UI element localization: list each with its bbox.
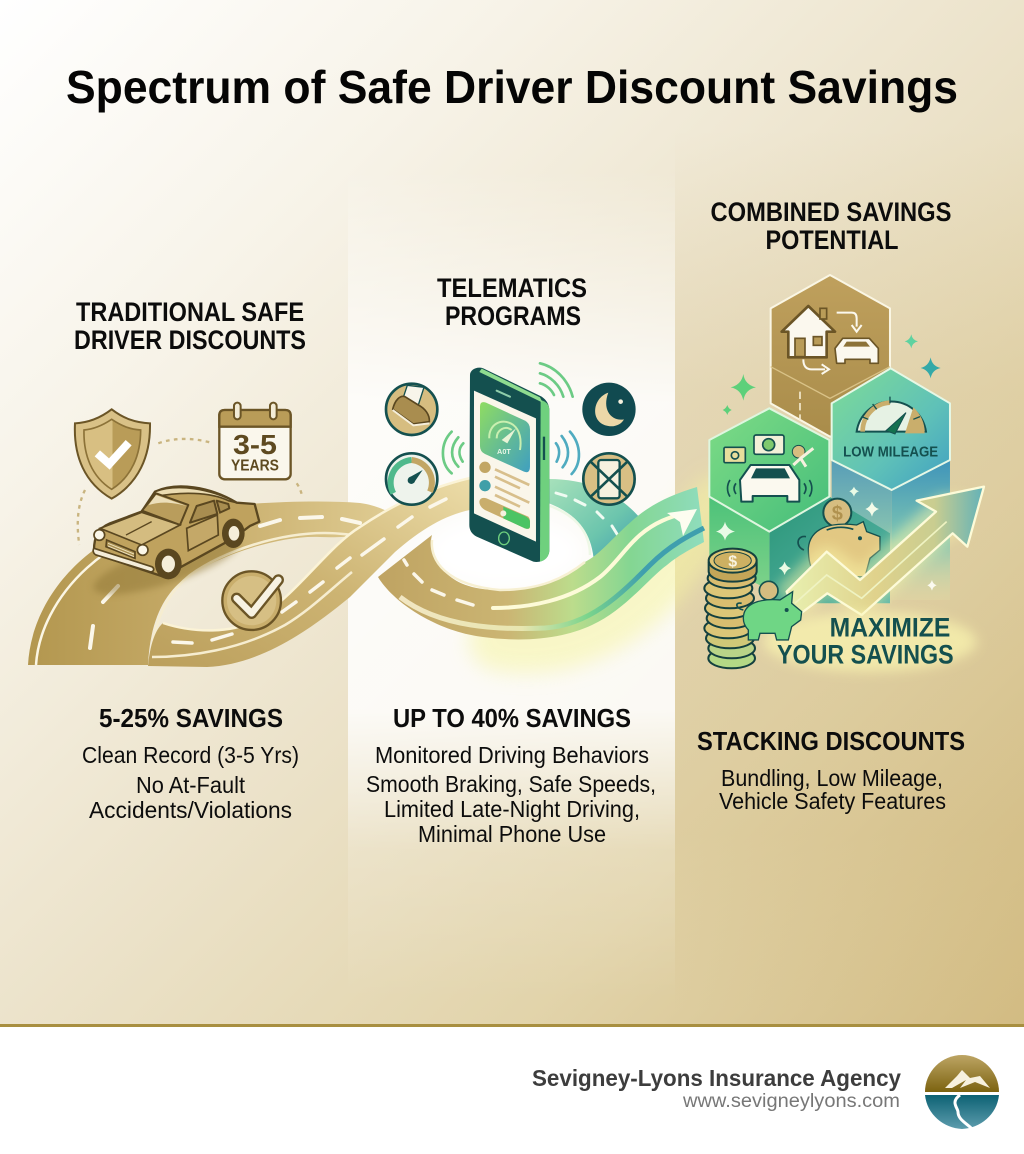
text block: traditional savings: No At-Fault bbox=[136, 772, 246, 798]
illustration: combined savings bbox=[704, 275, 984, 672]
heading: traditional safe driver discounts: TRADITIONAL SAFE bbox=[76, 297, 304, 327]
loop centre glow bbox=[425, 514, 585, 590]
icon: calendar 3-5 years: 3-5 bbox=[233, 429, 277, 460]
icon: smartphone: A0T bbox=[497, 447, 511, 456]
panel: combined savings column bbox=[675, 130, 1024, 1010]
road illustration bbox=[28, 478, 720, 668]
heading: combined savings potential bbox=[710, 197, 952, 255]
title: Spectrum of Safe Driver Discount Savings bbox=[66, 61, 958, 113]
hexagon: low mileage bbox=[832, 368, 950, 603]
icon: calendar 3-5 years bbox=[219, 403, 291, 479]
icon: coin stack bbox=[704, 549, 757, 668]
footer bbox=[0, 1024, 1024, 1154]
road: left curve past car bbox=[28, 502, 398, 665]
text: maximize your savings: YOUR SAVINGS bbox=[777, 639, 954, 669]
illustration: telematics phone bbox=[386, 363, 636, 562]
icon: calendar 3-5 years: YEARS bbox=[231, 458, 279, 475]
icon: gold piggy bank: $ bbox=[832, 503, 843, 525]
road shadow bbox=[60, 662, 215, 674]
panel: telematics column bbox=[348, 170, 675, 1000]
road: teal section behind phone bbox=[545, 479, 640, 562]
icon: check badge bbox=[222, 571, 281, 630]
text block: telematics savings: UP TO 40% SAVINGS bbox=[393, 705, 631, 733]
icon: classic car bbox=[88, 486, 259, 606]
hexagon: bundling home and auto bbox=[771, 275, 890, 437]
text: maximize your savings bbox=[777, 613, 954, 669]
text block: traditional savings: 5-25% SAVINGS bbox=[99, 705, 283, 733]
text block: telematics savings: Smooth Braking, Safe Speeds, bbox=[366, 771, 656, 797]
text: maximize your savings: MAXIMIZE bbox=[830, 613, 950, 643]
hexagon: vehicle safety features bbox=[709, 408, 890, 603]
road: loop to arrow bbox=[378, 487, 704, 639]
text block: stacking discounts: Bundling, Low Mileage, bbox=[721, 765, 943, 791]
text block: traditional savings: Clean Record (3-5 Yrs) bbox=[82, 742, 299, 768]
icon: green piggy bank bbox=[737, 581, 802, 640]
icon: smartphone bbox=[469, 368, 549, 562]
icon: rising arrow bbox=[787, 487, 984, 617]
logo bbox=[925, 1055, 999, 1129]
road: rising ribbon bbox=[148, 478, 470, 667]
illustration: traditional discount bbox=[75, 403, 302, 630]
icon: speedometer bbox=[386, 453, 437, 505]
heading: traditional safe driver discounts: DRIVER DISCOUNTS bbox=[74, 325, 306, 355]
icon: no phone bbox=[583, 453, 635, 505]
text block: telematics savings: Minimal Phone Use bbox=[418, 821, 606, 847]
text block: telematics savings bbox=[366, 705, 656, 847]
icon: accelerator shoe bbox=[386, 384, 437, 435]
sparkles bbox=[716, 334, 941, 591]
text block: stacking discounts bbox=[697, 728, 965, 814]
icon: night moon bbox=[582, 383, 636, 436]
signal waves bbox=[443, 363, 579, 474]
website: www.sevigneylyons.com bbox=[682, 1091, 900, 1112]
text block: telematics savings: Monitored Driving Behaviors bbox=[375, 742, 649, 768]
text block: traditional savings bbox=[82, 705, 299, 823]
icon: coin stack: $ bbox=[728, 554, 737, 571]
heading: combined savings potential: COMBINED SAVINGS bbox=[710, 197, 952, 227]
text glow bbox=[763, 612, 977, 672]
agency name: Sevigney-Lyons Insurance Agency bbox=[532, 1065, 901, 1091]
heading: telematics programs: PROGRAMS bbox=[445, 301, 581, 331]
heading: telematics programs bbox=[437, 273, 587, 331]
heading: combined savings potential: POTENTIAL bbox=[766, 225, 898, 255]
text block: stacking discounts: Vehicle Safety Features bbox=[719, 788, 946, 814]
arrow glow bbox=[790, 515, 967, 603]
icon: gold piggy bank bbox=[798, 499, 880, 577]
road glow bbox=[500, 505, 720, 642]
icon: shield with check bbox=[75, 409, 150, 499]
heading: traditional safe driver discounts bbox=[74, 297, 306, 355]
dotted connectors bbox=[78, 439, 302, 545]
heading: telematics programs: TELEMATICS bbox=[437, 273, 587, 303]
text block: traditional savings: Accidents/Violations bbox=[89, 797, 292, 823]
icon: road arrowhead bbox=[667, 509, 697, 536]
text block: stacking discounts: STACKING DISCOUNTS bbox=[697, 728, 965, 756]
hexagon: low mileage: LOW MILEAGE bbox=[843, 444, 938, 460]
text block: telematics savings: Limited Late-Night Driving, bbox=[384, 796, 640, 822]
